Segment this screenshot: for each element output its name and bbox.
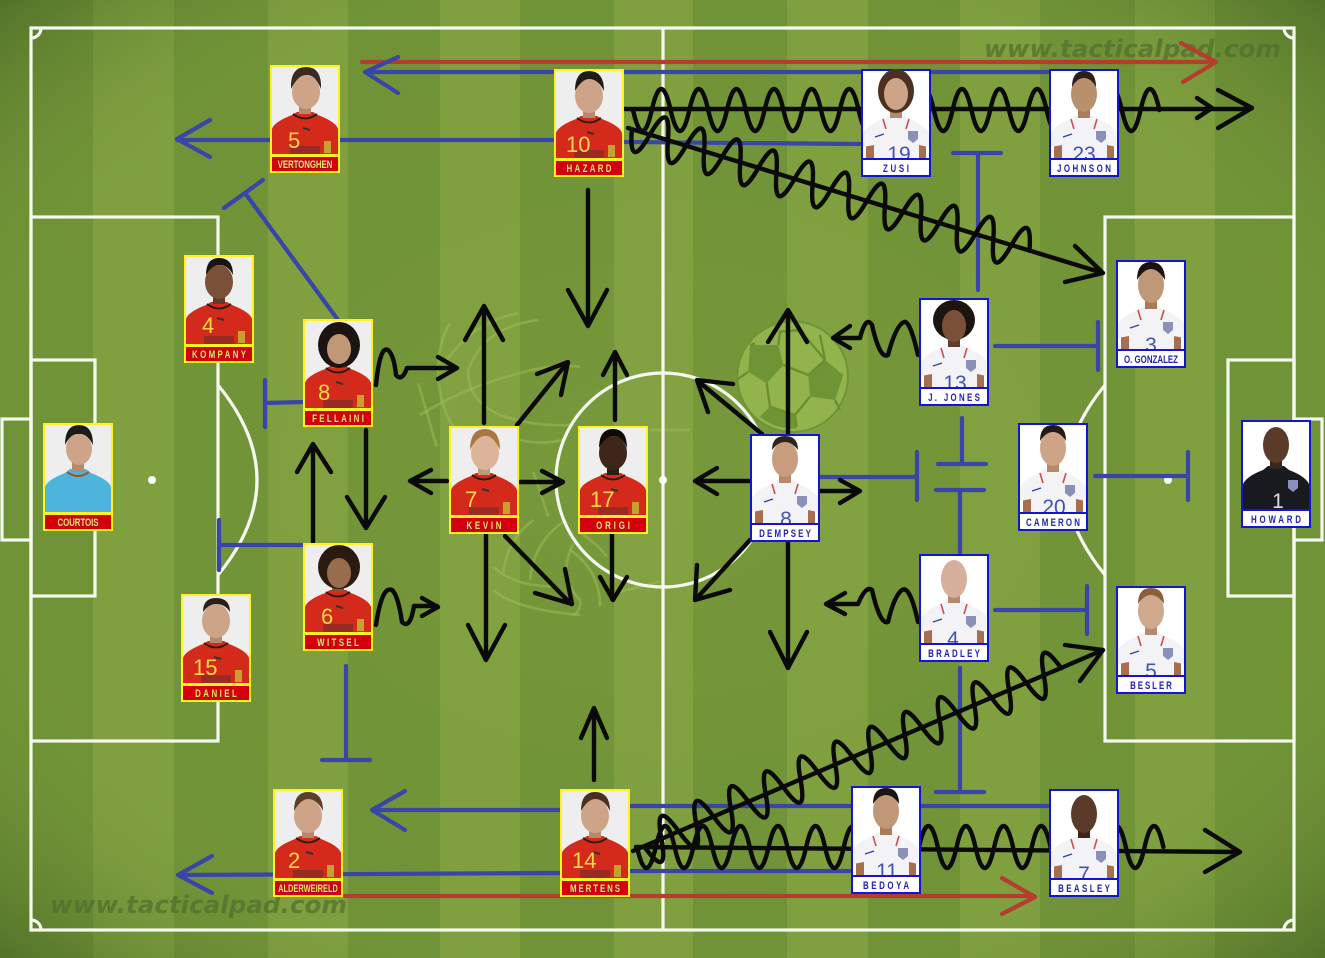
player card: Fellaini: 8 (318, 380, 330, 405)
name: Bradley: BRADLEY (928, 648, 980, 660)
arrow Hazard down (568, 190, 607, 326)
arrow Kevin down (468, 534, 505, 660)
player card: Fellaini (303, 319, 373, 427)
name: Courtois: COURTOIS (57, 517, 99, 529)
player card: Johnson: 23 (1072, 143, 1096, 166)
red run arrow top (362, 43, 1216, 82)
arrow Origi down (600, 534, 627, 600)
blue block Zusi zone (953, 153, 1001, 290)
player card: O. Gonzalez (1116, 260, 1186, 368)
name: O. Gonzalez: O. GONZALEZ (1124, 354, 1178, 366)
red run arrow bottom (345, 878, 1035, 914)
player card: Kevin: 7 (465, 487, 477, 512)
player card: Dempsey: 8 (780, 508, 792, 531)
blue arrow Vertonghen left (177, 120, 554, 157)
name: J. Jones: J. JONES (928, 392, 980, 404)
name: Kevin: KEVIN (467, 520, 502, 532)
player card: Kompany: 4 (202, 313, 214, 338)
player card: Daniel: 15 (193, 655, 217, 680)
player card: Bradley: 4 (947, 628, 959, 651)
player card: Mertens (560, 789, 630, 897)
player card: Witsel: 6 (321, 604, 333, 629)
arrow Kevin up-right (517, 362, 568, 425)
wavy arrow Jones (833, 322, 918, 356)
wavy arrow Fellaini (376, 349, 457, 385)
watermark bottom: www.tacticalpad.com (50, 891, 347, 919)
blue block Witsel down (322, 666, 370, 760)
player card: Alderweireld: 2 (288, 848, 300, 873)
blue block Cameron right (1095, 452, 1188, 500)
arrow Kevin left (410, 470, 447, 493)
watermark top: www.tacticalpad.com (984, 35, 1281, 63)
name: Vertonghen: VERTONGHEN (278, 159, 332, 171)
player card: Beasley: 7 (1078, 863, 1090, 886)
player card: Beasley (1049, 789, 1119, 897)
blue block Jones right (995, 322, 1098, 370)
player card: Vertonghen (270, 65, 340, 173)
player card: Johnson (1049, 69, 1119, 177)
player card: Besler: 5 (1145, 660, 1157, 683)
icon: faint football (737, 321, 848, 432)
player card: Besler (1116, 586, 1186, 694)
black wavy dribble Hazard top (625, 89, 1252, 131)
wavy arrow Bradley (826, 589, 918, 622)
blue line Hazard to Zusi (625, 142, 861, 144)
player card: Kompany (184, 255, 254, 363)
name: Kompany: KOMPANY (192, 349, 247, 361)
player card: Cameron (1018, 423, 1088, 531)
player card: Witsel (303, 543, 373, 651)
name: Witsel: WITSEL (317, 637, 359, 649)
blue arrow Alderweireld lane (178, 856, 851, 893)
player card: Bedoya (851, 786, 921, 894)
wavy arrow Witsel (376, 589, 438, 625)
blue block Bradley right (995, 586, 1087, 634)
black wavy dribble Mertens bottom (636, 826, 1240, 872)
player card: Daniel (181, 594, 251, 702)
name: Dempsey: DEMPSEY (759, 528, 811, 540)
arrow Dempsey right (820, 480, 860, 503)
arrow Dempsey up-left (697, 380, 762, 434)
player card: Alderweireld (273, 789, 343, 897)
arrow Dempsey down-left (695, 540, 750, 600)
name: Fellaini: FELLAINI (312, 413, 364, 425)
blue block Bradley up (936, 490, 984, 553)
player card: Vertonghen: 5 (288, 128, 300, 153)
name: Alderweireld: ALDERWEIRELD (278, 883, 338, 895)
name: Mertens: MERTENS (570, 883, 621, 895)
player card: Hazard: 10 (566, 132, 590, 157)
player card: J. Jones (919, 298, 989, 406)
blue block Jones down (938, 418, 986, 464)
player card: Cameron: 20 (1042, 496, 1066, 519)
arrow Fellaini down (347, 430, 385, 528)
player card: Zusi (861, 69, 931, 177)
blue block Fellaini left (265, 380, 303, 427)
blue arrow top pass lane (365, 57, 1049, 93)
name: Daniel: DANIEL (195, 688, 237, 700)
name: Zusi: ZUSI (883, 163, 909, 175)
player card: Bradley (919, 554, 989, 662)
player card: Howard (1241, 420, 1311, 528)
player card: Bedoya: 11 (876, 860, 898, 883)
arrow Dempsey up (768, 310, 807, 434)
name: Hazard: HAZARD (566, 163, 612, 175)
player card: O. Gonzalez: 3 (1145, 334, 1157, 357)
blue arrow Mertens lane (372, 791, 1049, 830)
blue block Bradley down (936, 668, 984, 792)
player card: Kevin (449, 426, 519, 534)
player card: Mertens: 14 (572, 848, 596, 873)
name: Bedoya: BEDOYA (863, 880, 909, 892)
player card: Howard: 1 (1272, 490, 1284, 513)
player card: Courtois (43, 423, 113, 531)
player card: Dempsey (750, 434, 820, 542)
player card: Hazard (554, 69, 624, 177)
name: Howard: HOWARD (1251, 514, 1301, 526)
name: Besler: BESLER (1130, 680, 1172, 692)
arrow Kevin up (465, 306, 503, 423)
black wavy dribble Mertens diagonal (633, 645, 1103, 866)
name: Johnson: JOHNSON (1057, 163, 1111, 175)
arrow Dempsey left (695, 468, 750, 494)
arrow Origi up (603, 352, 627, 420)
arrow Kevin right (520, 471, 563, 493)
arrow Kevin down-right (505, 536, 572, 604)
player card: J. Jones: 13 (943, 372, 967, 395)
arrow Witsel up (297, 444, 331, 543)
player card: Zusi: 19 (887, 143, 911, 166)
black wavy dribble Hazard diagonal (626, 109, 1103, 282)
decorative centre emblem (418, 313, 690, 615)
blue block Witsel left (219, 520, 303, 570)
name: Beasley: BEASLEY (1058, 883, 1110, 895)
player card: Origi (578, 426, 648, 534)
arrow Dempsey down (770, 542, 807, 668)
blue block Dempsey right (820, 452, 917, 500)
name: Cameron: CAMERON (1026, 517, 1080, 529)
player card: Origi: 17 (590, 487, 614, 512)
arrow Mertens up (581, 708, 607, 780)
name: Origi: ORIGI (596, 520, 630, 532)
blue block Fellaini to flank (224, 180, 338, 320)
